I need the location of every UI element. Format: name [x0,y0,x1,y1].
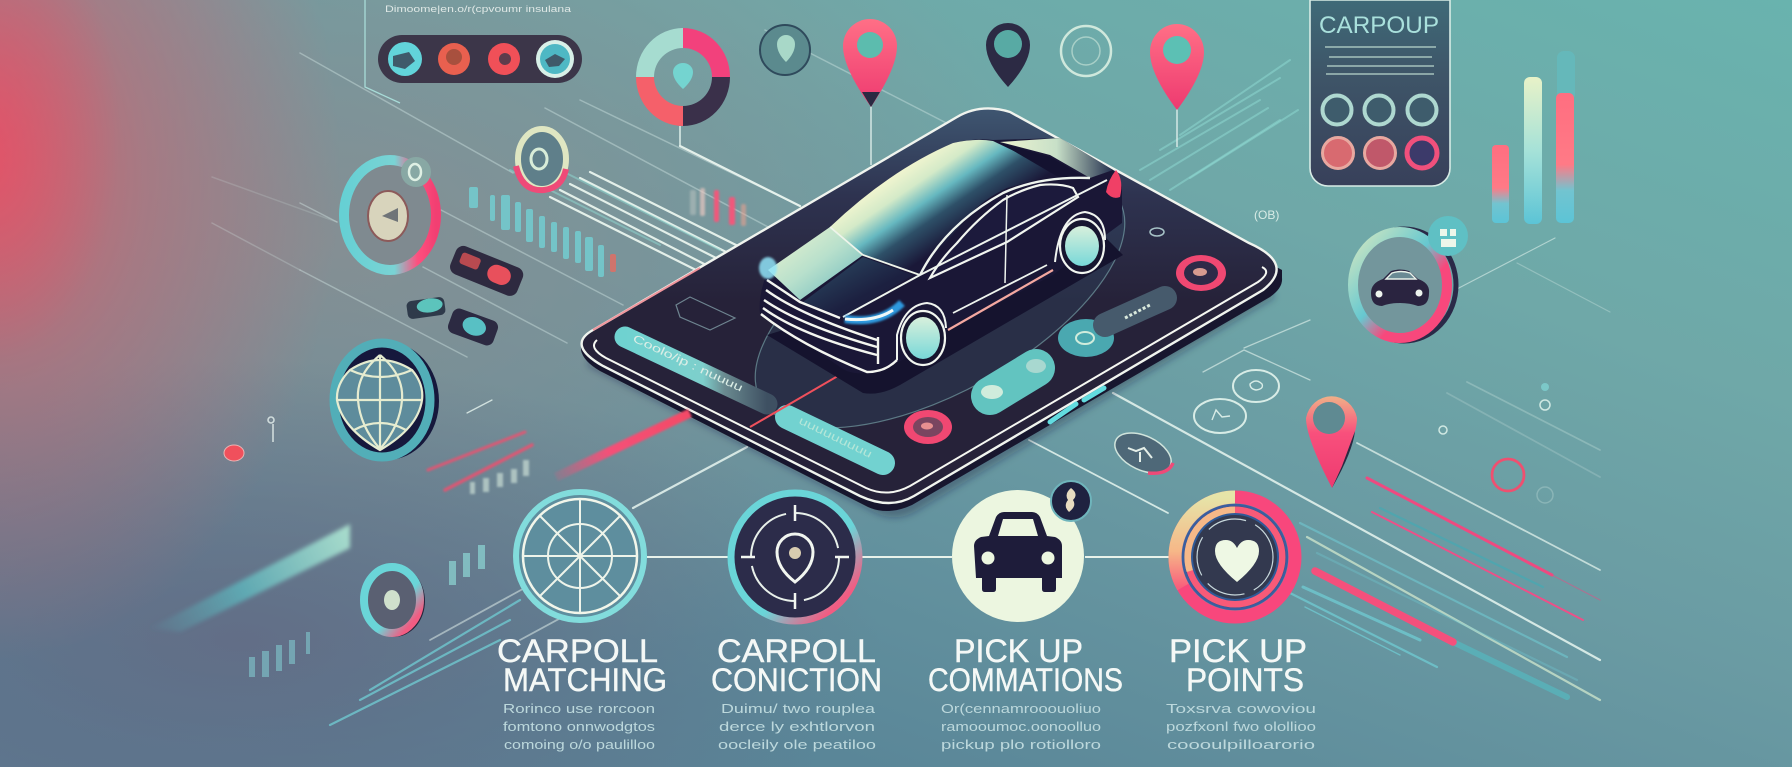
pill icon: red-orange [438,43,470,75]
globe icon [334,342,439,460]
top-left vertical rule [365,0,400,103]
description: Toxsrva cowoviou [1166,701,1316,716]
description: oocleily ole peatiloo [718,737,876,752]
description: comoing o/o paulilloo [504,737,655,752]
small scattered marks [1439,383,1553,503]
headlight glow [759,257,777,279]
ring icon b [1194,399,1246,433]
small dark ring icon [363,565,425,637]
side window outline [930,184,1078,278]
tail light [1106,170,1121,198]
pill icon: teal ring [536,40,574,78]
screen pill: bottom [787,415,883,463]
pink map pin [843,19,897,165]
panel title: CARPOUP [1319,12,1439,39]
step 1: carpool matching [497,492,667,752]
panel text lines [1325,47,1436,74]
description: Rorinco use rorcoon [503,701,655,716]
badge [1051,481,1091,521]
rear wheel [1060,219,1104,273]
car shadow [767,232,1123,394]
title: PICK UP [954,633,1083,669]
top-left caption: Dimoome|en.o/r(cpvoumr insulana [385,4,571,14]
step 2: carpool connection [711,493,882,752]
description: fomtono onnwodgtos [503,719,656,734]
right small icons [1194,370,1279,433]
panel icons row 2 [1322,138,1437,168]
description: derce ly exhtlorvon [719,719,875,734]
pill icon: red [488,43,520,75]
app panel [1310,0,1450,186]
play badge [368,191,408,241]
teal bar strip [469,187,616,277]
red connector line [750,373,843,427]
screen pill: top-left: Coolo/ip : nuuuu [631,333,745,394]
small pin mark [268,417,274,442]
rear window dark band [1000,143,1090,180]
step 3: pick up commutations: COMMATIONS [928,662,1123,698]
step 1: carpool matching: MATCHING [503,662,667,698]
donut chart [636,28,730,146]
hood [768,227,863,300]
description [941,701,1101,752]
red button upper [1176,255,1226,291]
side buttons [1050,388,1104,422]
red button lower [904,410,952,444]
fender outline [897,212,1105,360]
car body [760,138,1122,373]
car icon [952,481,1091,622]
description [718,701,876,752]
target icon [731,493,859,621]
ring icon a [1233,370,1279,402]
screen outline detail [676,297,735,330]
car ground ring [716,120,1164,480]
lower-left bar group [249,632,310,677]
glass location marker [760,25,810,75]
tablet [581,108,1282,511]
wheel icon [516,492,644,620]
description: coooulpilloarorio [1167,737,1315,752]
globe grid [337,355,422,450]
dark card 1 [448,244,526,298]
pink streak [556,413,690,477]
dark map pin [986,23,1030,87]
windshield edge line [830,227,920,275]
panel icons row 1 [1322,96,1436,124]
car ring icon [1352,216,1468,341]
coral map pin [1150,24,1204,147]
description: pickup plo rotiolloro [941,737,1101,752]
tablet shadow [590,292,1272,511]
red dot [224,445,244,461]
car [759,138,1123,394]
small pink ring [1492,459,1524,491]
small pill icon [1109,425,1177,481]
sill line [948,270,1053,330]
description [503,701,656,752]
hood dark panel [803,257,913,317]
teal streak [150,524,350,632]
description [1166,701,1316,752]
front grille lines [761,280,897,372]
step 4: pick up points: POINTS [1186,662,1304,698]
left ring icon [344,157,436,270]
dark card 2 [406,296,446,320]
ring marker [1061,26,1111,76]
description: ramooumoc.oonoolluo [941,719,1101,734]
connector lines [647,556,1169,558]
small bar group [449,545,485,585]
car silhouette [1371,270,1429,306]
diagonal background lines [212,30,1610,725]
door and body lines [843,178,1107,317]
description: pozfxonl fwo olollioo [1166,719,1316,734]
teal control pill [981,359,1046,399]
dark card 3 [446,307,500,347]
badge [1428,216,1468,256]
pink accent streaks [428,432,1600,697]
rear roof wedge [1000,138,1113,178]
top-left icon pill [378,35,582,83]
tablet inner bezel [594,267,1266,493]
roof glass [830,140,1060,275]
title: PICK UP [1169,633,1307,669]
step 3: pick up commutations [928,481,1123,752]
step 4: pick up points [1166,497,1316,752]
description: Or(cennamrooouoliuo [941,701,1101,716]
lower right map pin [1306,396,1357,488]
screen pill: top-left [625,333,767,404]
blurred bars by red streaks [470,460,529,494]
front wheel [901,311,945,365]
teal control circle [1058,319,1114,357]
text glyph: (OB) [1254,208,1279,222]
description: Duimu/ two rouplea [721,701,876,716]
title: CARPOLL [497,633,658,669]
heart icon [1175,497,1295,617]
grey slider pill [1105,298,1165,325]
bar 3 ghost cap [1557,51,1575,101]
small ring icon [516,129,566,190]
tablet screen [582,108,1277,503]
screen pill: bottom: uuuuuuuuu [797,415,874,461]
step 2: carpool connection: CONICTION [711,662,882,698]
title: CARPOLL [717,633,876,669]
small screen glyph [1150,228,1164,236]
bar chart [1492,51,1575,224]
faded bars near car [690,188,746,226]
pill icon: teal [388,42,422,76]
donut centre pin [673,63,693,89]
